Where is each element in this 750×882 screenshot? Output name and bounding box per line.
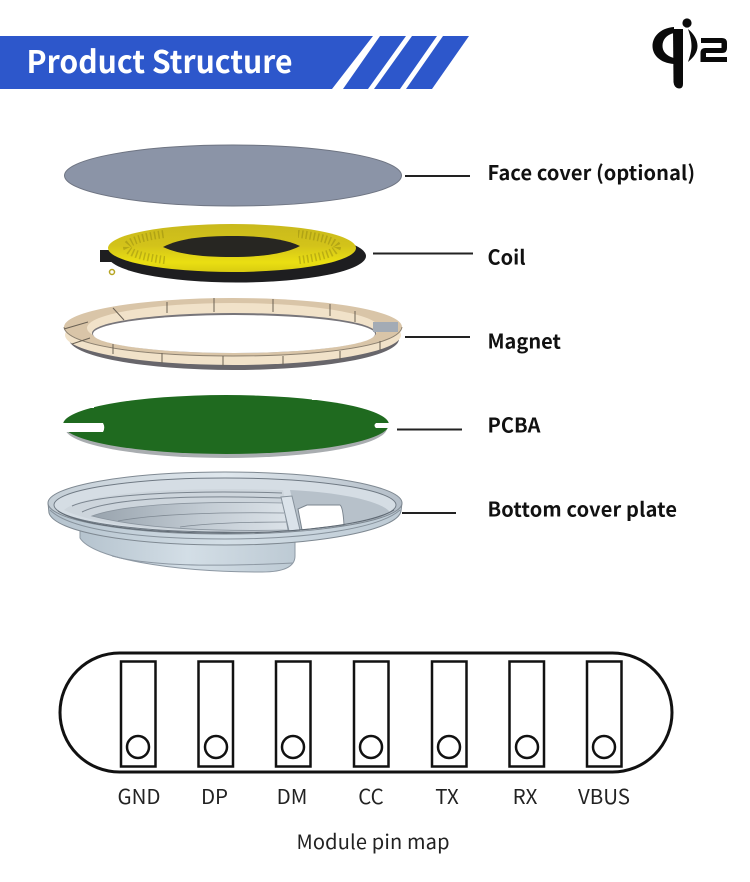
pin labels: DM — [277, 780, 307, 810]
layer: magnet ring — [64, 298, 402, 370]
header banner — [0, 36, 469, 89]
layer: coil — [100, 224, 366, 282]
pin map — [60, 653, 672, 772]
leader line: bottom cover plate — [402, 512, 456, 514]
cover interior floor — [64, 489, 291, 532]
label: magnet: Magnet — [488, 326, 562, 354]
cover lower bowl — [80, 530, 295, 572]
pin labels: VBUS — [578, 780, 630, 810]
magnet top face — [64, 298, 402, 356]
pin RX — [510, 662, 544, 766]
label: face cover: Face cover (optional) — [488, 157, 695, 186]
leader line: coil — [373, 252, 473, 254]
caption: Module pin map — [296, 826, 450, 855]
cover rim wall — [48, 503, 402, 545]
pin labels: TX — [435, 780, 459, 810]
pin labels: CC — [358, 780, 384, 810]
pin labels: GND — [117, 780, 161, 810]
leader line: magnet — [405, 336, 470, 338]
magnet underside — [69, 308, 399, 370]
layer: PCBA — [58, 395, 392, 458]
label: coil: Coil — [488, 242, 526, 270]
pin DP — [198, 662, 233, 766]
layer: face cover — [64, 145, 402, 206]
magnet outer wall — [65, 305, 401, 365]
pin TX — [432, 662, 466, 766]
pin VBUS — [587, 662, 622, 766]
magnet segment joints — [64, 298, 380, 366]
leader line: PCBA — [397, 428, 462, 430]
icon: qi2 logo — [652, 18, 727, 88]
pin GND — [121, 662, 156, 766]
pin CC — [354, 662, 388, 766]
title: Product Structure — [26, 37, 292, 82]
pin labels: RX — [513, 780, 538, 810]
cover rim top — [48, 472, 402, 534]
layer: bottom cover plate — [48, 472, 402, 572]
label: PCBA: PCBA — [488, 410, 541, 438]
pin labels — [117, 780, 630, 810]
module outline — [60, 653, 672, 772]
pin labels: DP — [201, 780, 228, 810]
cover rib — [281, 496, 300, 531]
label: bottom cover plate: Bottom cover plate — [488, 494, 677, 522]
leader line: face cover — [405, 175, 470, 177]
magnet inner wall and hole — [87, 303, 379, 353]
cover window — [298, 505, 344, 530]
pin DM — [276, 662, 310, 766]
